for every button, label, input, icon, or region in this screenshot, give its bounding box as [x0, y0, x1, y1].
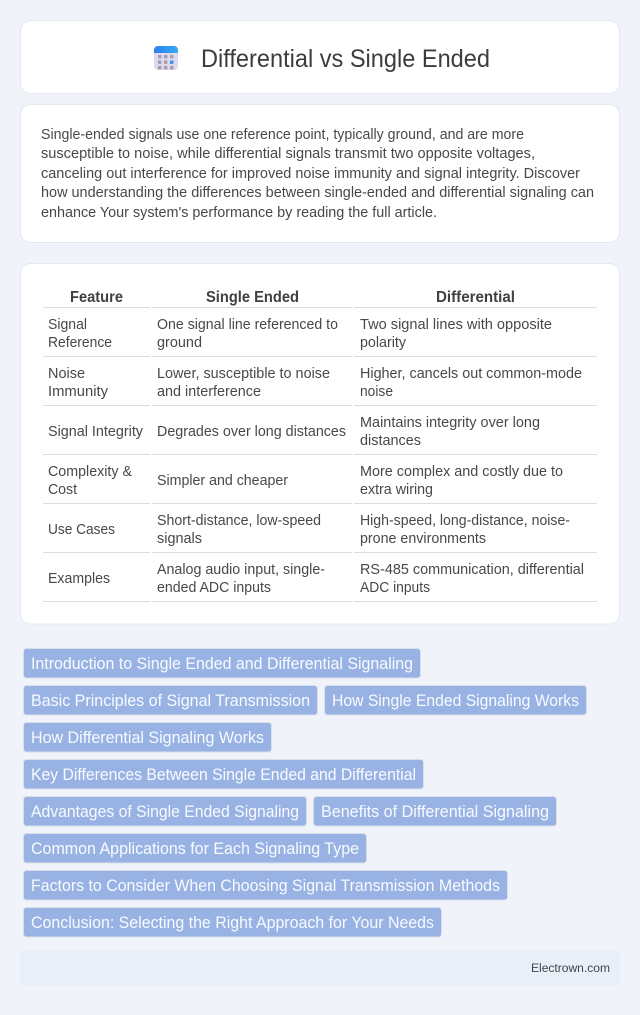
- chip: conclusion: Conclusion: Selecting the Right Approach for Your Needs: [31, 913, 434, 932]
- intro text block: [41, 127, 594, 221]
- table row: noise immunity: Noise: [48, 366, 85, 382]
- title: Differential vs Single Ended: [201, 46, 490, 73]
- table row: use cases: High-speed, long-distance, noise-: [360, 513, 570, 529]
- panel: header: [20, 20, 620, 94]
- chip: applications: Common Applications for Each Signaling Type: [31, 839, 359, 858]
- table row: complexity and cost: Complexity &: [48, 464, 132, 480]
- table row: use cases: [43, 513, 597, 553]
- chip: applications: [24, 834, 366, 863]
- footer credit: Electrown.com: [531, 961, 610, 975]
- table row: complexity and cost: More complex and costly due to: [360, 464, 563, 480]
- table row: noise immunity: Immunity: [48, 384, 109, 400]
- chip: key differences: [24, 760, 424, 789]
- topic chips: [24, 648, 586, 937]
- chip: conclusion: [24, 908, 442, 937]
- chip: single ended signaling: [324, 686, 586, 715]
- panel: comparison table: [20, 264, 620, 624]
- table row: use cases: Use Cases: [48, 522, 115, 538]
- table row: signal reference: ground: [157, 335, 202, 351]
- table row: noise immunity: Higher, cancels out common-mode: [360, 366, 582, 382]
- chip: key differences: Key Differences Between Single Ended and Differential: [31, 765, 416, 784]
- table row: signal reference: polarity: [360, 335, 407, 351]
- chip: basic principles: Basic Principles of Signal Transmission: [31, 691, 310, 710]
- table row: noise immunity: and interference: [157, 384, 261, 400]
- table header row: Differential: [436, 289, 515, 306]
- chip: differential signaling: How Differential Signaling Works: [31, 728, 264, 747]
- chip: introduction: [24, 648, 420, 678]
- table row: complexity and cost: Simpler and cheaper: [157, 473, 288, 489]
- table row: signal reference: [43, 317, 597, 357]
- table row: examples: Examples: [48, 571, 110, 587]
- chip: benefits: [314, 796, 556, 826]
- table row: signal integrity: Maintains integrity over long: [360, 415, 540, 431]
- chip: introduction: Introduction to Single Ended and Differential Signaling: [31, 654, 413, 673]
- intro text block: Single-ended signals use one reference point, typically ground, and are more: [41, 127, 524, 143]
- table row: examples: Analog audio input, single-: [157, 562, 325, 578]
- table row: examples: RS-485 communication, differential: [360, 562, 584, 578]
- icon: calendar: [154, 46, 178, 70]
- table row: use cases: Short-distance, low-speed: [157, 513, 321, 529]
- panel: introduction: [20, 104, 620, 242]
- chip: factors: Factors to Consider When Choosing Signal Transmission Methods: [31, 876, 500, 895]
- table row: signal reference: One signal line referenced to: [157, 317, 338, 333]
- table row: noise immunity: [43, 366, 597, 406]
- table row: examples: [43, 562, 597, 602]
- table row: use cases: prone environments: [360, 531, 486, 547]
- table header row: Feature: [70, 289, 123, 306]
- table row: signal integrity: Degrades over long distances: [157, 424, 346, 440]
- table row: examples: ended ADC inputs: [157, 580, 271, 596]
- table header row: [43, 289, 597, 308]
- intro text block: how understanding the differences between single-ended and differential signaling can: [41, 185, 594, 201]
- intro text block: enhance Your system's performance by reading the full article.: [41, 205, 437, 221]
- footer: [20, 951, 620, 985]
- table row: complexity and cost: Cost: [48, 482, 77, 498]
- table row: complexity and cost: extra wiring: [360, 482, 433, 498]
- table header row: Single Ended: [206, 289, 299, 306]
- chip: single ended signaling: How Single Ended Signaling Works: [332, 691, 579, 710]
- chip: differential signaling: [24, 722, 272, 752]
- table row: signal reference: Signal: [48, 317, 87, 333]
- table row: noise immunity: noise: [360, 384, 393, 400]
- table row: examples: ADC inputs: [360, 580, 430, 596]
- intro text block: canceling out interference for improved noise immunity and signal integrity. Discover: [41, 166, 580, 182]
- chip: advantages: Advantages of Single Ended Signaling: [31, 802, 299, 821]
- intro text block: susceptible to noise, while differential signals transmit two opposite voltages,: [41, 146, 535, 162]
- table row: noise immunity: Lower, susceptible to noise: [157, 366, 330, 382]
- table row: use cases: signals: [157, 531, 202, 547]
- table row: signal reference: Reference: [48, 335, 112, 351]
- chip: advantages: [24, 796, 306, 826]
- table row: signal reference: Two signal lines with opposite: [360, 317, 552, 333]
- chip: basic principles: [24, 686, 318, 715]
- table row: signal integrity: Signal Integrity: [48, 424, 144, 440]
- table row: complexity and cost: [43, 464, 597, 504]
- chip: factors: [24, 870, 508, 900]
- table row: signal integrity: distances: [360, 433, 421, 449]
- table row: signal integrity: [43, 415, 597, 455]
- chip: benefits: Benefits of Differential Signaling: [321, 802, 549, 821]
